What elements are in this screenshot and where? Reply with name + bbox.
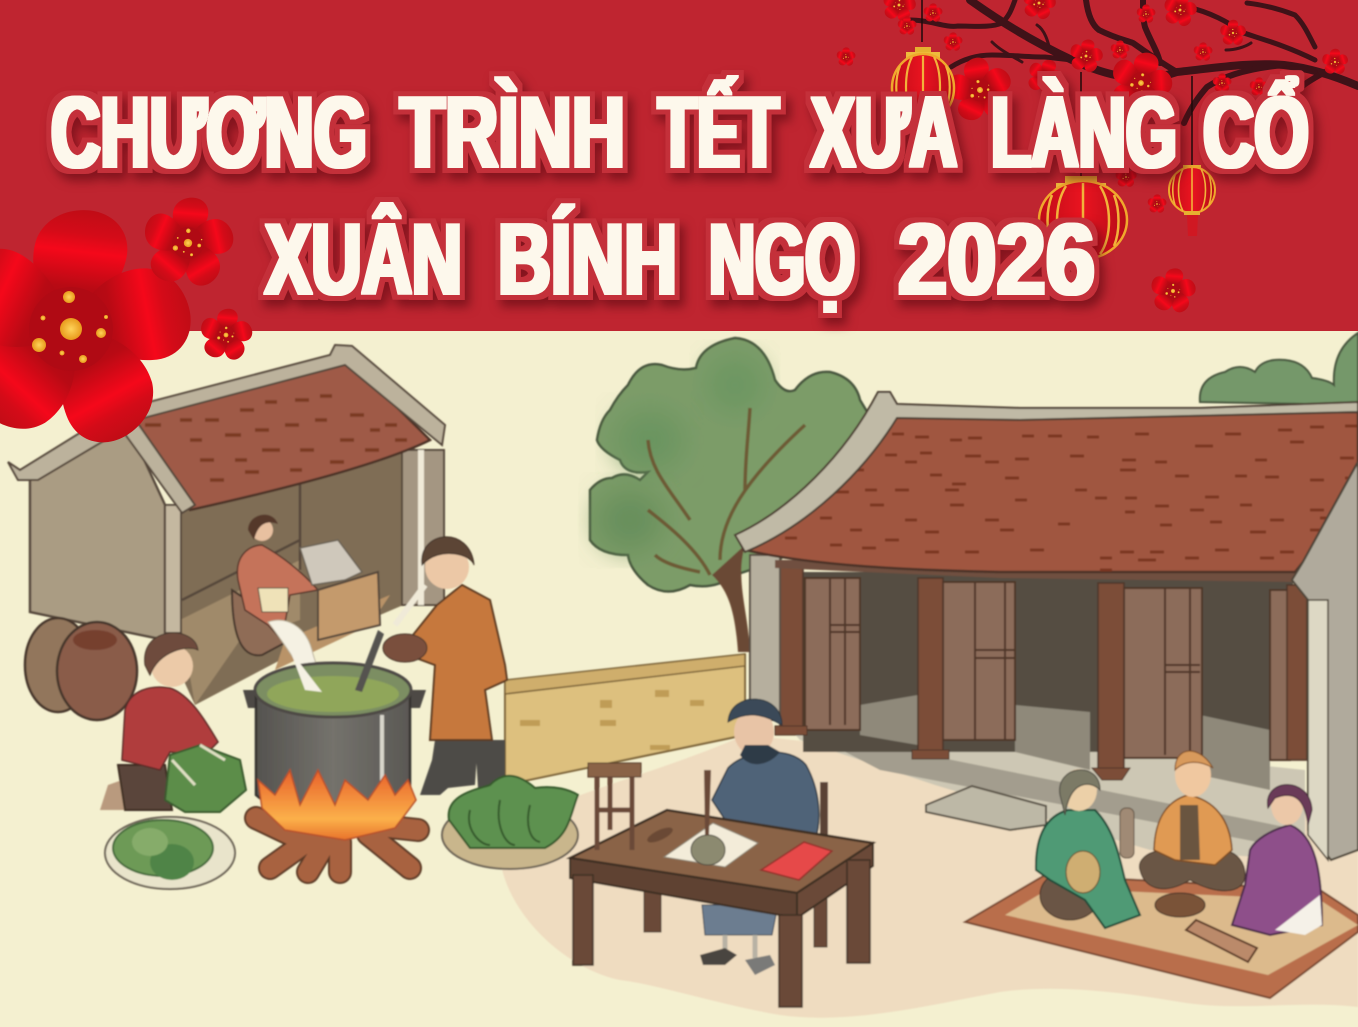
courtyard ground (500, 735, 1358, 1018)
kitchen hut (8, 345, 445, 705)
singer in purple (1232, 785, 1322, 935)
porch platform (778, 715, 1305, 860)
small blossom: lower (195, 306, 256, 365)
communal house (735, 392, 1358, 860)
left end wall (750, 555, 780, 720)
title: 2026 (898, 204, 1095, 316)
title: LÀNG (991, 77, 1177, 189)
seated musicians (1036, 751, 1322, 962)
stone step (926, 786, 1046, 830)
interior (803, 572, 1293, 752)
lantern: small right (1169, 76, 1215, 236)
right background tree (1200, 333, 1358, 405)
small blossom: upper (135, 193, 241, 294)
central tree (590, 338, 872, 652)
title (51, 77, 1309, 316)
red header banner (0, 0, 1358, 331)
title: TẾT (658, 77, 779, 189)
roof tiles (745, 412, 1358, 572)
mat (965, 875, 1358, 998)
musician in green (1036, 769, 1140, 928)
woman pouring rice (232, 515, 380, 692)
blossom branch: top right (836, 0, 1358, 188)
clappers on mat (1186, 920, 1257, 962)
village scene (8, 333, 1358, 1018)
title: XƯA (811, 77, 957, 189)
musician in orange (1139, 751, 1245, 917)
lantern: upper (892, 0, 954, 122)
door panels (805, 578, 1290, 760)
title: CHƯƠNG (51, 77, 367, 189)
large plum blossom (0, 194, 213, 468)
title: XUÂN (265, 203, 462, 316)
basket of leaves (442, 776, 578, 869)
man stirring (383, 537, 507, 795)
ridge (735, 392, 1358, 552)
beam (775, 560, 1300, 582)
wooden columns (780, 565, 1307, 773)
fire and firewood (256, 770, 418, 872)
cooking pot (243, 622, 426, 818)
lantern: large (1039, 72, 1127, 260)
small blossom: lower right banner (1147, 266, 1199, 317)
woman wrapping cakes (100, 633, 246, 812)
title: TRÌNH (400, 77, 625, 189)
blossoms on branch (836, 0, 1349, 188)
brick wall (505, 654, 745, 785)
small blossom: mid banner (1147, 194, 1167, 214)
calligrapher and table (570, 699, 873, 1007)
right gable wall (1292, 462, 1358, 860)
title: CỔ (1203, 77, 1309, 189)
title: BÍNH (498, 204, 677, 316)
title: NGỌ (709, 204, 855, 316)
leaf plate: left (105, 817, 235, 889)
wooden barrels (25, 618, 137, 720)
